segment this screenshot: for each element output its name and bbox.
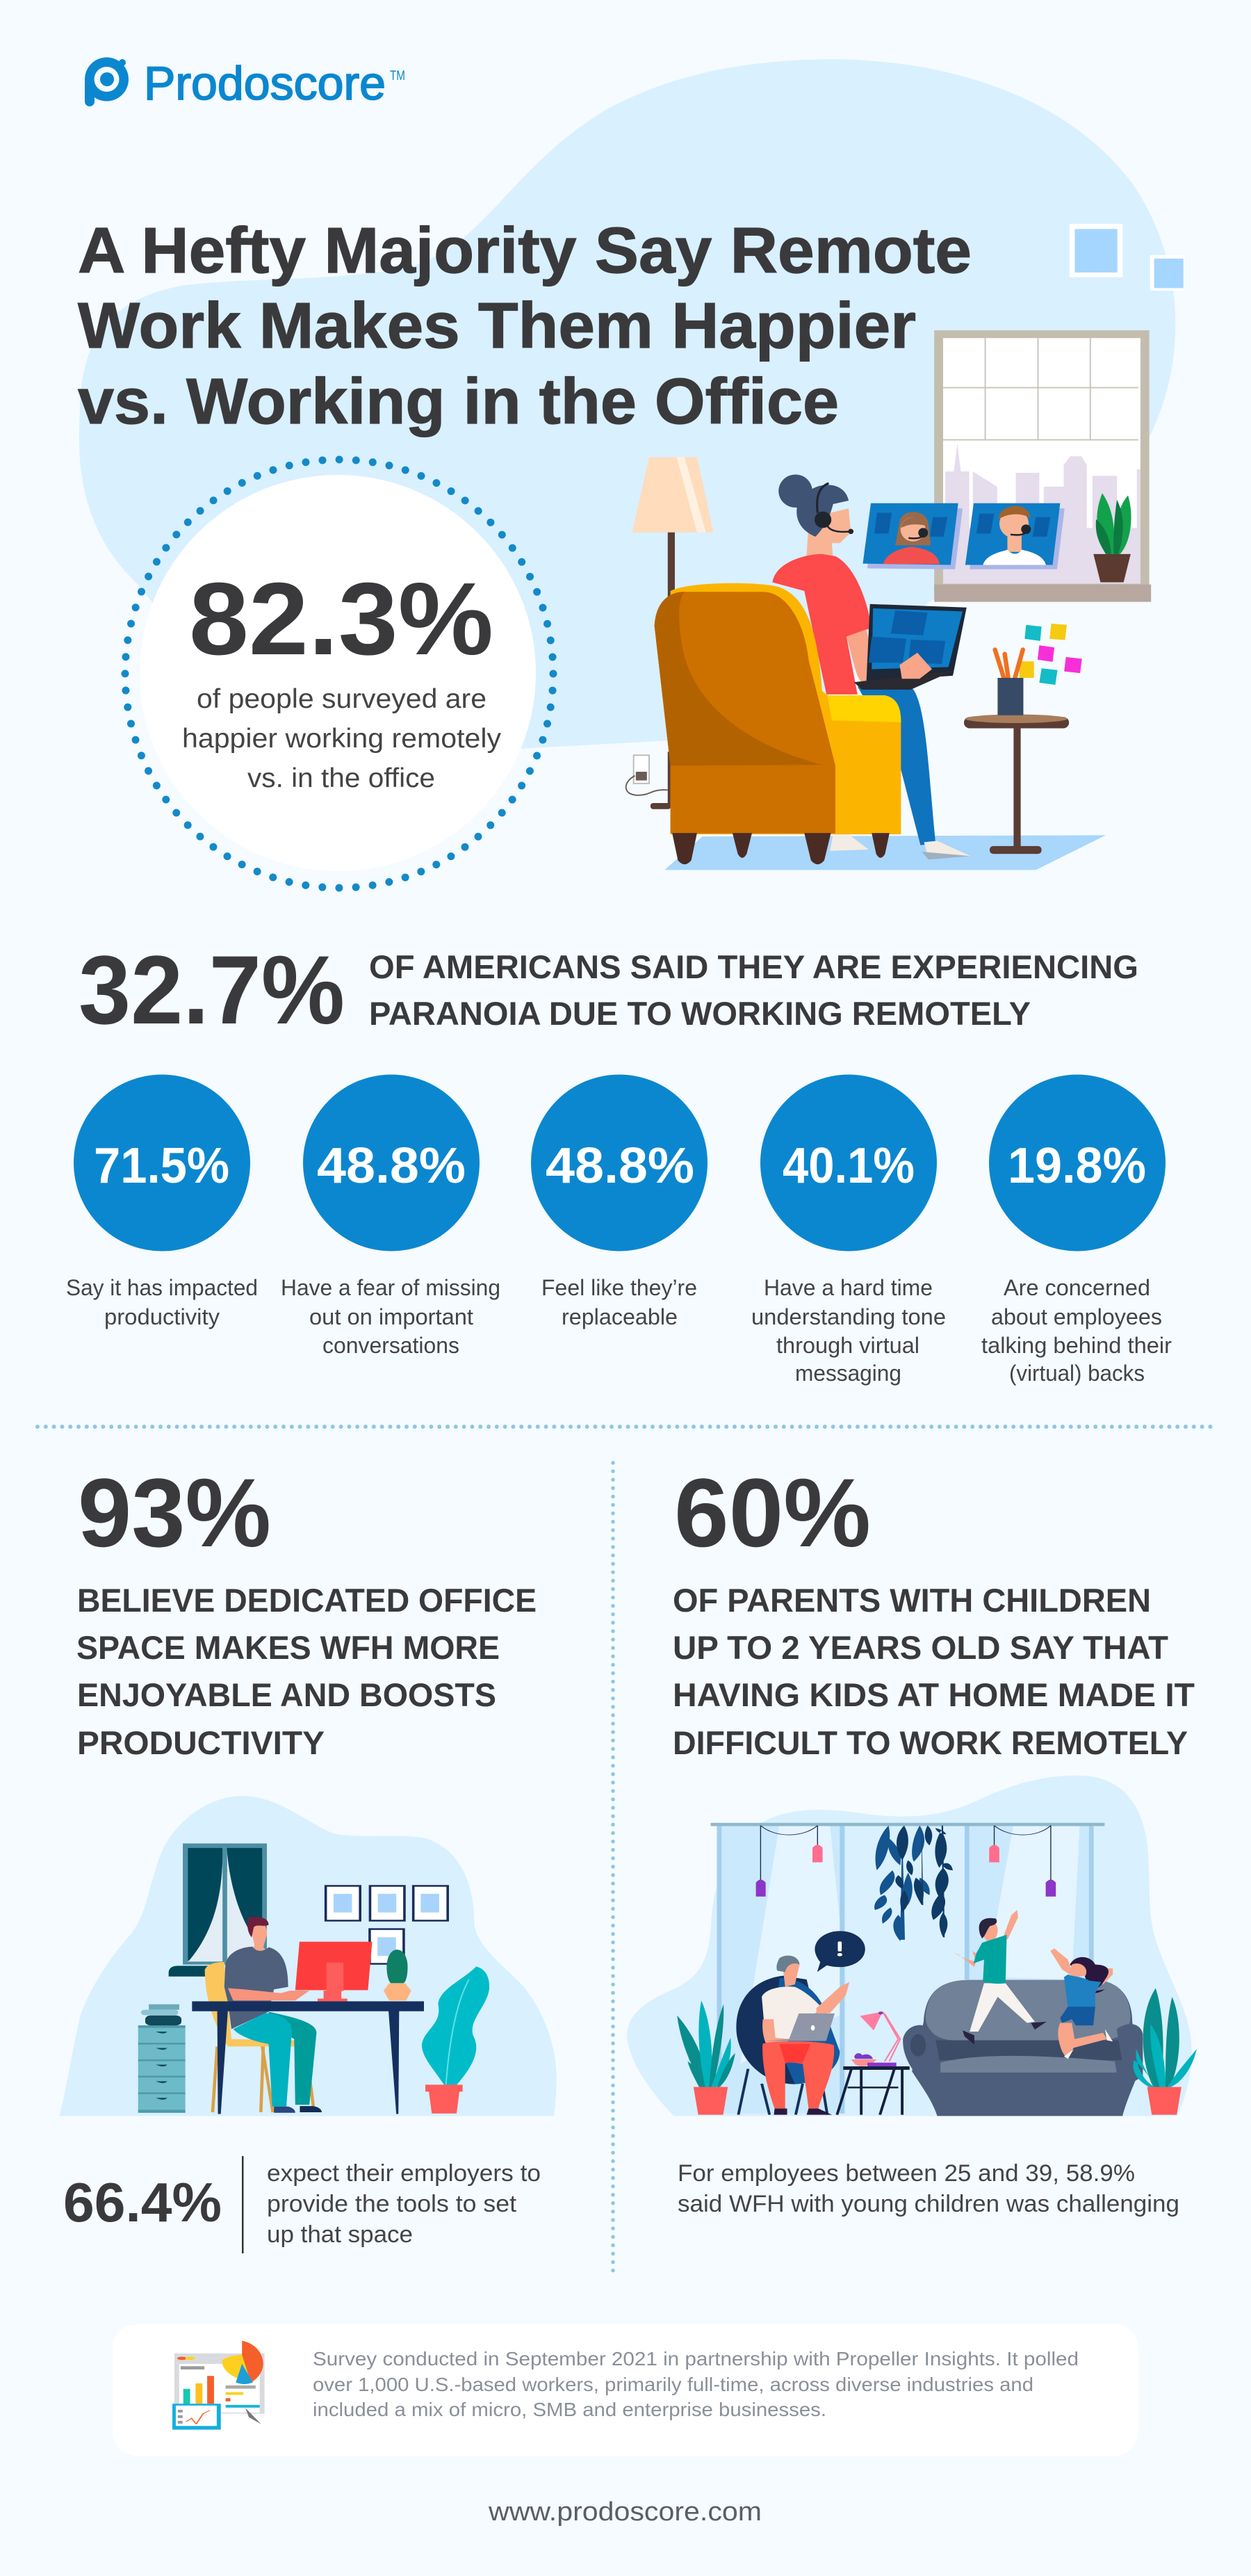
stat description: happier working remotely (182, 724, 502, 754)
floor lamp (632, 457, 713, 809)
stat description: vs. in the office (247, 763, 435, 793)
sticky notes (1020, 624, 1082, 685)
stat: 82.3%: 82.3% (189, 562, 493, 677)
panel: dedicated office space (60, 1458, 557, 2253)
sofa (903, 1980, 1143, 2116)
stat circle: 40.1%: through virtual (776, 1333, 919, 1358)
logo: Prodoscore (85, 57, 405, 110)
stat circle: 40.1%: Have a hard time (764, 1275, 933, 1300)
illustration: man at desk (60, 1796, 557, 2116)
stat circle: 48.8% replaceable: 48.8% (546, 1138, 694, 1194)
small plant (384, 1950, 411, 2000)
title (78, 214, 972, 437)
curtains (711, 1823, 1104, 2114)
plant right (1134, 1988, 1197, 2115)
stat: 60%: 60% (674, 1458, 871, 1567)
stat circle: 71.5%: productivity (104, 1304, 220, 1329)
stat description: employers: provide the tools to set (267, 2191, 517, 2217)
stat circle: 19.8%: 19.8% (1008, 1138, 1146, 1194)
heading: dedicated office: PRODUCTIVITY (77, 1724, 325, 1761)
child boy jumping (953, 1910, 1047, 2045)
stat circle: 71.5% (66, 1075, 258, 1329)
stat circle: 48.8% fear of missing out (281, 1075, 500, 1358)
title: A Hefty Majority Say Remote (78, 214, 972, 286)
window with curtains (169, 1843, 267, 1977)
heading: dedicated office: SPACE MAKES WFH MORE (76, 1629, 500, 1666)
armchair (655, 583, 901, 864)
stat description: young children: said WFH with young children was challenging (678, 2191, 1179, 2217)
title: Work Makes Them Happier (78, 289, 916, 362)
heading: parents: HAVING KIDS AT HOME MADE IT (673, 1676, 1195, 1713)
stat description: young children: For employees between 25 and 39, 58.9% (678, 2160, 1135, 2187)
stat circle: 48.8% fear of missing out: conversations (322, 1333, 459, 1358)
laptop (854, 604, 967, 690)
stat circle: 71.5%: 71.5% (94, 1138, 229, 1194)
heading: dedicated office: ENJOYABLE AND BOOSTS (77, 1676, 496, 1713)
hanging vines (874, 1826, 953, 1941)
parent in egg chair (736, 1956, 849, 2115)
window (934, 330, 1151, 602)
video call screen: woman (862, 503, 963, 569)
icon: logo mark (85, 57, 129, 106)
panel: survey note (113, 2324, 1138, 2456)
stat description: of people surveyed are (197, 684, 486, 714)
rug (664, 835, 1106, 870)
title: vs. Working in the Office (78, 365, 839, 437)
heading: paranoia: OF AMERICANS SAID THEY ARE EXPERIENCING (369, 948, 1138, 985)
survey text: over 1,000 U.S.-based workers, primarily full-time, across diverse industries and (313, 2374, 1033, 2395)
desk (192, 2001, 424, 2114)
side table (964, 715, 1069, 854)
stat: 93%: 93% (78, 1458, 271, 1567)
stat description: employers (267, 2160, 541, 2248)
stat description (182, 684, 502, 793)
stat description: young children (678, 2160, 1179, 2217)
stat circle: 19.8%: talking behind their (981, 1333, 1172, 1358)
pencil holder (995, 649, 1023, 715)
stat: 66.4%: 66.4% (63, 2171, 222, 2233)
decorative squares (1070, 224, 1185, 291)
icon: charts (172, 2341, 265, 2429)
stat circle: 19.8%: about employees (991, 1304, 1162, 1329)
stat: 32.7%: 32.7% (79, 935, 345, 1044)
speech bubble (815, 1931, 865, 1972)
monitor (295, 1942, 373, 2001)
hanging lights (760, 1826, 1051, 1883)
stat circle: 48.8% fear of missing out: 48.8% (317, 1138, 466, 1194)
stat description: employers: up that space (267, 2221, 413, 2248)
stat circle: 71.5%: Say it has impacted (66, 1275, 258, 1300)
brand name: Prodoscore (144, 57, 386, 110)
panel: parents with children (627, 1458, 1197, 2217)
stat circle: 48.8% fear of missing out: Have a fear of missing (281, 1275, 500, 1300)
potted plant (1093, 493, 1131, 583)
chair (205, 1962, 314, 2112)
survey text: Survey conducted in September 2021 in partnership with Propeller Insights. It polled (313, 2348, 1079, 2370)
stat circle: 40.1%: 40.1% (783, 1138, 915, 1194)
heading: parents: UP TO 2 YEARS OLD SAY THAT (673, 1629, 1168, 1666)
stat circle: 48.8% replaceable: Feel like they’re (541, 1275, 697, 1300)
survey text (313, 2348, 1079, 2420)
heading: parents: OF PARENTS WITH CHILDREN (673, 1582, 1151, 1619)
picture frames (326, 1886, 448, 1964)
stat description: employers: expect their employers to (267, 2160, 541, 2187)
heading: paranoia (369, 948, 1138, 1032)
illustration: woman on video call (626, 330, 1151, 870)
trademark: TM (390, 69, 405, 83)
video call screen: man (965, 503, 1065, 569)
illustration: parent with kids on sofa (627, 1776, 1197, 2116)
stat circle: 19.8% (981, 1075, 1172, 1386)
heading: parents: DIFFICULT TO WORK REMOTELY (673, 1724, 1188, 1761)
heading: dedicated office: BELIEVE DEDICATED OFFICE (77, 1582, 537, 1619)
stat circle: 40.1% (751, 1075, 946, 1386)
stat circle: 19.8%: Are concerned (1004, 1275, 1150, 1300)
stat circle: 40.1%: messaging (795, 1361, 901, 1386)
wall outlet (626, 755, 668, 795)
website url: www.prodoscore.com (488, 2497, 762, 2527)
stat circle: 48.8% replaceable (531, 1075, 708, 1329)
stat group: paranoia breakdown (66, 1075, 1172, 1386)
heading: paranoia: PARANOIA DUE TO WORKING REMOTELY (369, 995, 1031, 1032)
child girl jumping (1050, 1948, 1113, 2059)
stat circle: 48.8% fear of missing out: out on important (309, 1304, 473, 1329)
stat circle: 40.1%: understanding tone (751, 1304, 946, 1329)
survey text: included a mix of micro, SMB and enterprise businesses. (313, 2399, 826, 2420)
heading: parents (673, 1582, 1195, 1761)
stat circle: 48.8% replaceable: replaceable (562, 1304, 678, 1329)
filing cabinet and books (138, 2004, 186, 2113)
man (224, 1917, 322, 2113)
callout: 82.3% circle (125, 460, 553, 888)
tall plant (422, 1966, 489, 2114)
woman (772, 474, 971, 859)
plant left (677, 2000, 735, 2115)
background blob (79, 59, 1175, 750)
stat circle: 19.8%: (virtual) backs (1009, 1361, 1145, 1386)
side table and desk lamp (837, 2011, 910, 2115)
heading: dedicated office (76, 1582, 537, 1761)
